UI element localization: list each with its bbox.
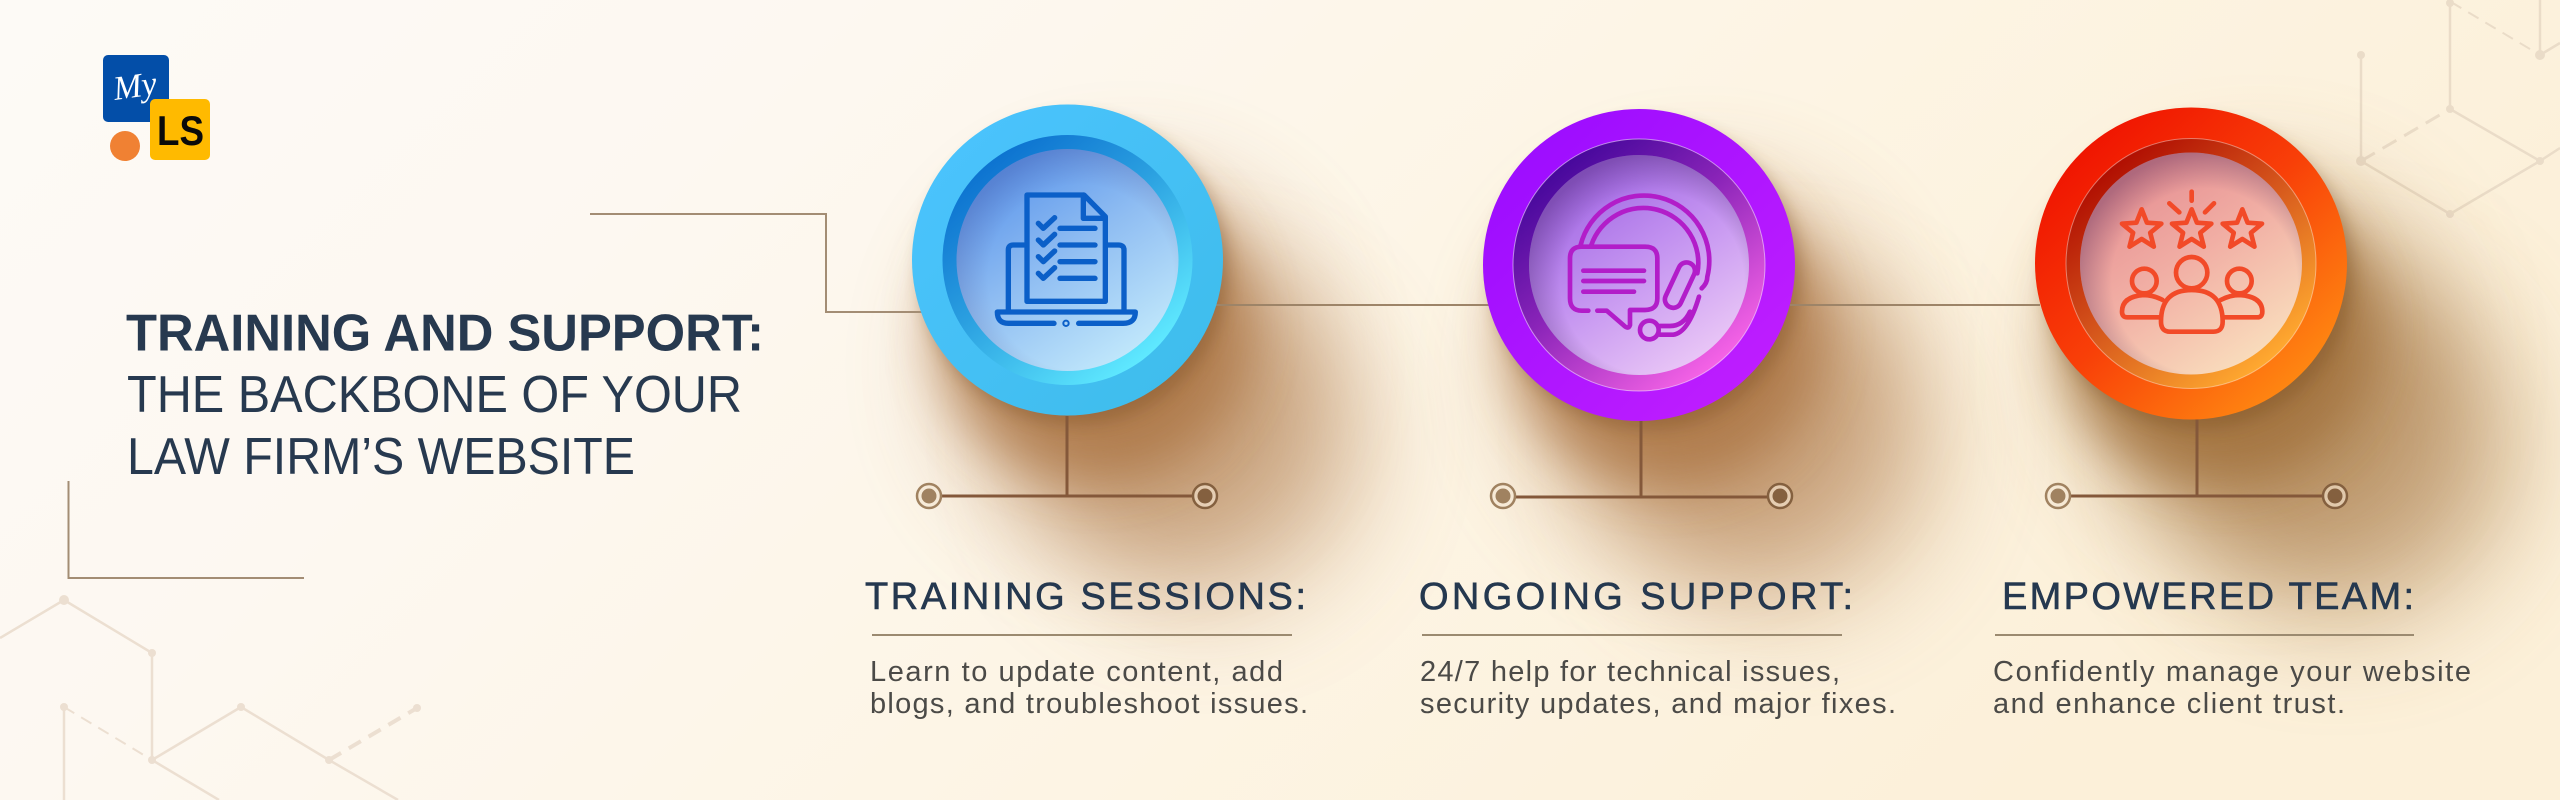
rule <box>872 634 1292 636</box>
purple disc <box>1483 109 1795 421</box>
description: security updates, and major fixes. <box>1420 688 1896 720</box>
description <box>1993 656 2471 720</box>
circle drop shadows <box>919 115 2513 620</box>
description: 24/7 help for technical issues, <box>1420 656 1840 688</box>
panel: training sessions <box>865 104 1308 720</box>
description <box>1420 656 1896 720</box>
panel: ongoing support <box>1419 109 1896 720</box>
stem and node bar <box>917 416 1217 508</box>
description: blogs, and troubleshoot issues. <box>870 688 1308 720</box>
blue disc <box>912 104 1223 416</box>
description: Learn to update content, add <box>870 656 1283 688</box>
title: THE BACKBONE OF YOUR <box>127 366 742 424</box>
description: and enhance client trust. <box>1993 688 2345 720</box>
heading: TRAINING SESSIONS: <box>865 576 1306 618</box>
decorative hexagon network: top right <box>2356 0 2560 218</box>
heading: EMPOWERED TEAM: <box>2002 576 2414 618</box>
connector: title to first circle <box>590 214 925 312</box>
connector: first circle to second circle <box>1215 304 1490 306</box>
logo: My <box>110 65 160 108</box>
logo: LS <box>157 107 204 154</box>
panel: empowered team <box>1993 108 2471 720</box>
title <box>126 304 764 486</box>
stem and node bar <box>1491 421 1792 508</box>
heading: ONGOING SUPPORT: <box>1419 576 1853 618</box>
corner bracket below title <box>68 481 304 578</box>
icon: checklist on laptop <box>997 195 1135 324</box>
icon: three stars above team <box>2122 192 2262 332</box>
rule <box>1995 634 2414 636</box>
rule <box>1422 634 1842 636</box>
connector: second circle to third circle <box>1790 304 2040 306</box>
title: TRAINING AND SUPPORT: <box>126 304 764 362</box>
icon: headset with chat bubble <box>1570 196 1709 339</box>
decorative hexagon network: bottom left <box>0 595 421 800</box>
description: Confidently manage your website <box>1993 656 2471 688</box>
description <box>870 656 1308 720</box>
logo <box>103 55 210 161</box>
stem and node bar <box>2046 419 2347 508</box>
red-orange disc <box>2035 108 2347 420</box>
title: LAW FIRM’S WEBSITE <box>127 428 635 486</box>
